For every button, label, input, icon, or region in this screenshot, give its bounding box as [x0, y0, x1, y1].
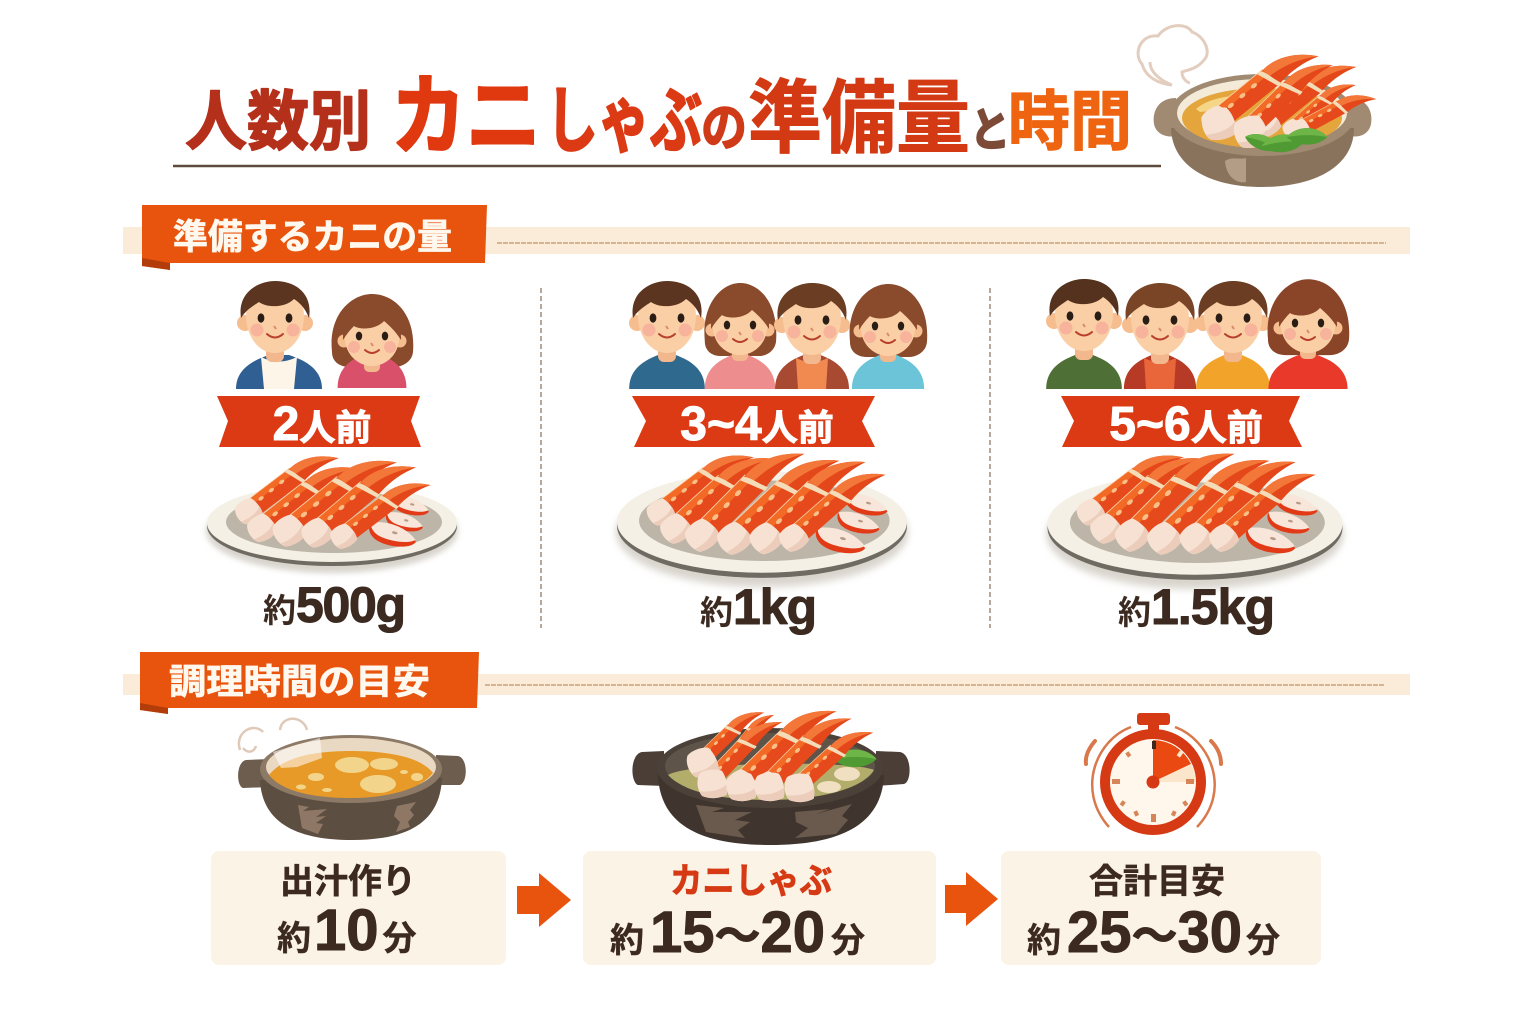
arrow	[517, 873, 571, 927]
icon: four people	[629, 281, 927, 389]
box: 合計目安: 約25～30分	[1027, 900, 1280, 965]
box: カニしゃぶ: カニしゃぶ	[670, 862, 832, 901]
illustration: plate of crab legs, small	[206, 440, 458, 573]
section heading: 調理時間の目安: 調理時間の目安	[169, 663, 430, 702]
title: しゃぶ	[546, 82, 702, 162]
ribbon: 3〜4人前: 3~4人前	[680, 398, 834, 451]
title: の	[701, 100, 747, 158]
ribbon: 5〜6人前: 5~6人前	[1109, 398, 1263, 451]
title: 時間	[1008, 85, 1132, 158]
amount: 約1.5kg: 約1.5kg	[1118, 579, 1275, 635]
ribbon: 2人前: 2人前	[273, 398, 371, 451]
box: 合計目安: 合計目安	[1089, 863, 1225, 901]
arrow	[945, 872, 998, 926]
icon: stopwatch	[1086, 713, 1221, 830]
box: 出汁作り: 約10分	[277, 898, 417, 963]
box: カニしゃぶ	[583, 851, 936, 965]
section heading: 準備するカニの量	[123, 205, 1410, 270]
title: カニ	[391, 67, 541, 166]
title: 準備量	[748, 74, 970, 163]
section heading: 準備するカニの量: 準備するカニの量	[173, 218, 452, 257]
ribbon: 2人前	[217, 396, 421, 451]
ribbon: 3〜4人前	[632, 396, 875, 451]
divider	[540, 288, 542, 628]
divider	[989, 288, 991, 628]
icon: crab hot pot with steam	[1138, 26, 1377, 187]
ribbon: 5〜6人前	[1061, 396, 1302, 451]
title: 人数別	[185, 85, 371, 158]
illustration: plate of crab legs, large	[1046, 434, 1344, 589]
amount: 約1kg: 約1kg	[700, 579, 817, 635]
icon: four people	[1046, 279, 1349, 389]
step: crab pot	[632, 693, 910, 845]
title: と	[970, 104, 1010, 156]
panel: 2人前	[206, 281, 458, 633]
section heading: 調理時間の目安	[123, 652, 1410, 714]
step: dashi pot	[238, 719, 466, 840]
panel: 3〜4人前	[616, 281, 927, 635]
box: 合計目安	[1001, 851, 1321, 965]
box: カニしゃぶ: 約15～20分	[610, 900, 865, 965]
box: 出汁作り	[211, 851, 506, 965]
panel: 5〜6人前	[1046, 279, 1349, 635]
title	[185, 67, 1132, 166]
icon: couple	[236, 281, 413, 389]
box: 出汁作り: 出汁作り	[280, 863, 416, 901]
amount: 約500g: 約500g	[263, 577, 406, 633]
illustration: plate of crab legs, medium	[616, 434, 908, 587]
